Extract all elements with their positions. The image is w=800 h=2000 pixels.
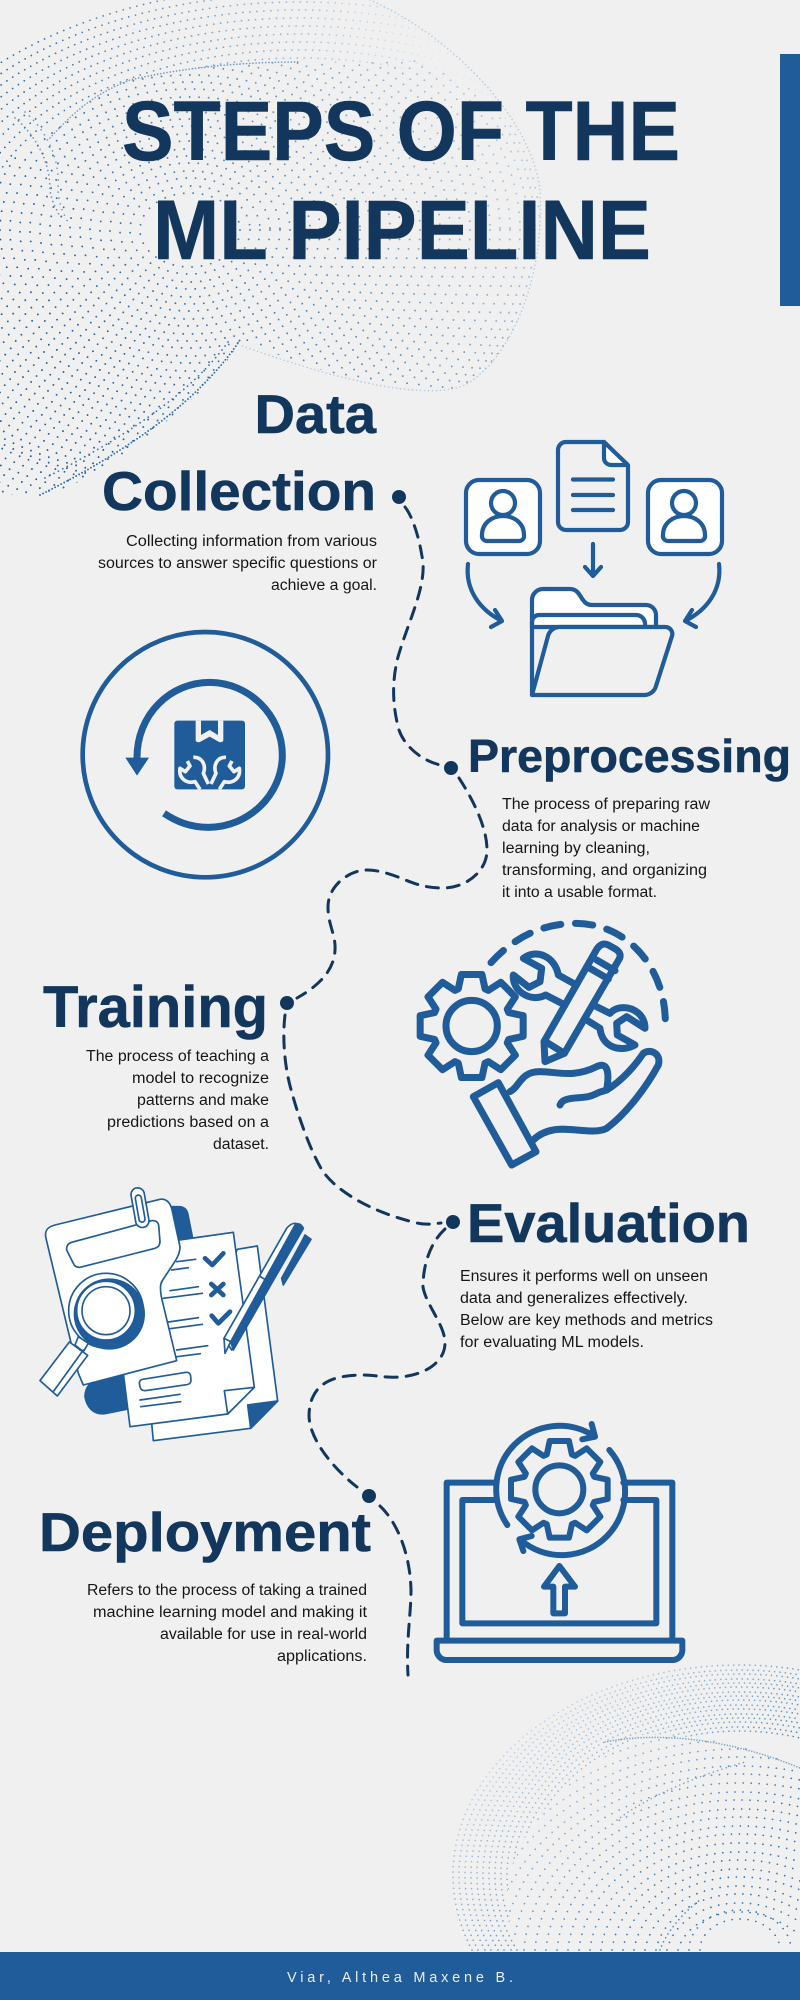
description: preprocessing — [502, 796, 711, 901]
section: preprocessing — [83, 632, 791, 901]
icon: profiles and document into folder — [466, 442, 722, 695]
heading: data collection: Data — [254, 383, 376, 445]
title: ML PIPELINE — [153, 183, 651, 277]
dot pattern: top-left swirl — [0, 0, 542, 496]
description: training: model to recognize — [132, 1070, 269, 1087]
description: data collection: achieve a goal. — [271, 577, 377, 594]
description: data collection — [98, 533, 377, 594]
section: data collection — [98, 383, 722, 695]
dot pattern: bottom-right swirl — [447, 1665, 800, 1950]
icon: laptop with gear cycle and upload arrow — [437, 1424, 682, 1660]
title — [122, 84, 680, 277]
icon: clipboard, magnifier, checklist and pen — [40, 1187, 311, 1441]
section: deployment — [39, 1424, 682, 1665]
description: evaluation: for evaluating ML models. — [460, 1334, 644, 1351]
description: deployment: available for use in real-world — [160, 1626, 367, 1643]
description: evaluation: Below are key methods and metrics — [460, 1312, 713, 1329]
footer band — [0, 1952, 800, 2000]
description: preprocessing: it into a usable format. — [502, 884, 657, 901]
icon: cycle around wrench box — [83, 632, 328, 877]
description: training: dataset. — [213, 1136, 269, 1153]
description: preprocessing: transforming, and organizing — [502, 862, 707, 879]
description: evaluation — [460, 1268, 713, 1351]
heading: data collection — [102, 383, 376, 522]
description: deployment — [87, 1582, 368, 1665]
heading: deployment: Deployment — [39, 1501, 371, 1563]
description: training: predictions based on a — [107, 1114, 269, 1131]
heading: data collection: Collection — [102, 460, 376, 522]
right accent bar — [780, 54, 800, 306]
description: training: The process of teaching a — [86, 1048, 269, 1065]
connector node dots — [280, 490, 460, 1503]
title: STEPS OF THE — [122, 84, 680, 178]
heading: training: Training — [43, 975, 268, 1040]
description: preprocessing: data for analysis or machine — [502, 818, 700, 835]
description: deployment: applications. — [277, 1648, 367, 1665]
footer author name: Viar, Althea Maxene B. — [287, 1970, 513, 1986]
description: evaluation: data and generalizes effectively. — [460, 1290, 688, 1307]
heading: evaluation: Evaluation — [467, 1192, 750, 1254]
heading: preprocessing: Preprocessing — [468, 730, 791, 782]
section: training — [43, 923, 665, 1165]
description: training — [86, 1048, 269, 1153]
description: data collection: sources to answer specific questions or — [98, 555, 377, 572]
description: deployment: machine learning model and making it — [93, 1604, 368, 1621]
description: evaluation: Ensures it performs well on unseen — [460, 1268, 708, 1285]
dashed pipeline connector — [284, 507, 487, 1675]
section: evaluation — [40, 1187, 750, 1441]
description: preprocessing: learning by cleaning, — [502, 840, 650, 857]
description: data collection: Collecting information from various — [126, 533, 377, 550]
description: deployment: Refers to the process of taking a trained — [87, 1582, 367, 1599]
icon: gear, wrench and pencil over hand — [420, 923, 665, 1165]
description: training: patterns and make — [137, 1092, 269, 1109]
description: preprocessing: The process of preparing raw — [502, 796, 711, 813]
